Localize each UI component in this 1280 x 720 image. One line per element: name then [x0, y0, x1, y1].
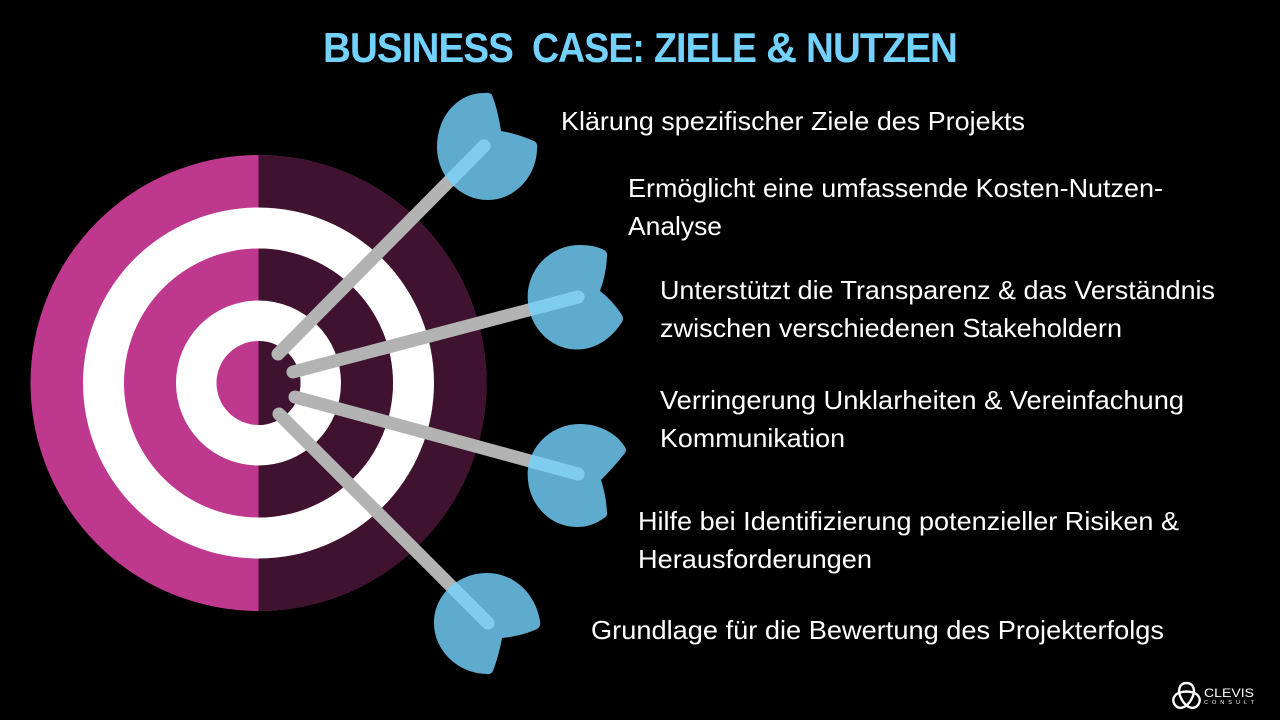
text: goal 5: Herausforderungen	[638, 544, 872, 574]
text: goal 6: Grundlage für die Bewertung des Projekterfolgs	[591, 615, 1164, 645]
title: CASE:	[532, 24, 644, 71]
wordmark	[1204, 688, 1255, 706]
text: goal 4: Verringerung Unklarheiten & Vereinfachung	[660, 385, 1184, 415]
text: goal 2: Ermöglicht eine umfassende Kosten-Nutzen-	[628, 173, 1163, 203]
title: ZIELE	[654, 24, 756, 71]
target	[30, 155, 486, 611]
icon: logo mark	[1171, 683, 1202, 710]
wordmark: CONSULT	[1204, 700, 1255, 706]
title: NUTZEN	[806, 24, 957, 71]
text: goal 4: Kommunikation	[660, 423, 845, 453]
text: goal 2: Analyse	[628, 211, 722, 241]
title: &	[766, 24, 797, 71]
dart 2	[293, 245, 623, 372]
title	[323, 24, 957, 71]
dart 4	[279, 414, 540, 674]
dart 3	[295, 397, 626, 527]
text: goal 3: zwischen verschiedenen Stakeholdern	[660, 313, 1122, 343]
text: goal 5	[638, 506, 1179, 574]
dart 1	[278, 93, 537, 354]
text: goal 5: Hilfe bei Identifizierung potenzieller Risiken &	[638, 506, 1179, 536]
wordmark: CLEVIS	[1204, 688, 1254, 700]
text: goal 1: Klärung spezifischer Ziele des Projekts	[561, 106, 1025, 136]
title: BUSINESS	[323, 24, 513, 71]
logo	[1171, 683, 1255, 710]
text: goal 3	[660, 275, 1215, 343]
text: goal 4	[660, 385, 1184, 453]
text: goal 3: Unterstützt die Transparenz & das Verständnis	[660, 275, 1215, 305]
text: goal 2	[628, 173, 1163, 241]
